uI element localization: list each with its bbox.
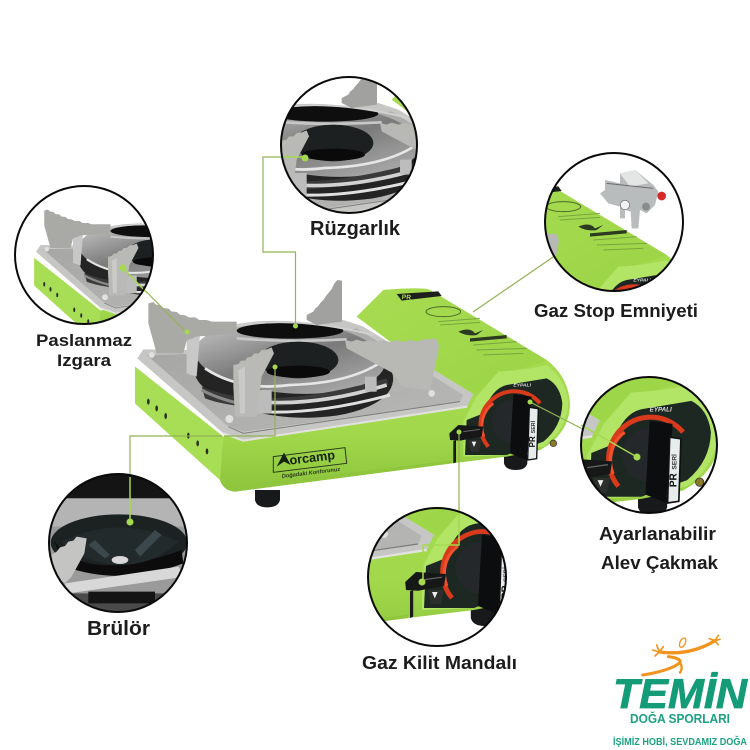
- label: Brülör: Brülör: [87, 618, 150, 640]
- control panel with dial: SERİ: [530, 420, 537, 433]
- leader lines and dots on the stove: [123, 157, 637, 582]
- brand logo: Temin Doğa Sporları: [613, 635, 749, 748]
- gas lock latch: [449, 425, 483, 441]
- steel tray: [137, 320, 473, 441]
- control panel with dial: EYPALI: [513, 383, 532, 389]
- orcamp brand logo: [273, 448, 347, 480]
- stove product photo: PR: [402, 294, 411, 302]
- logo subtitle: DOĞA SPORLARI: [630, 711, 730, 726]
- orcamp brand logo: orcamp: [289, 448, 336, 468]
- logo wordmark: TEMİN: [613, 670, 749, 717]
- stove product photo: [135, 280, 570, 507]
- stove feet: [255, 455, 527, 507]
- pan support grates: [148, 280, 439, 423]
- label: Gaz Kilit Mandalı: Gaz Kilit Mandalı: [362, 653, 517, 673]
- control panel with dial: [465, 378, 562, 460]
- callout circle: Gaz Stop Emniyeti: [544, 152, 684, 292]
- callout circle: Brülör: [45, 470, 195, 613]
- callout circle: Gaz Kilit Mandalı: [367, 507, 507, 647]
- icon: gas valve: [600, 170, 666, 228]
- callout circle: Ayarlanabilir Alev Çakmak: [580, 376, 718, 514]
- label: Ayarlanabilir Alev Çakmak: Ayarlanabilir: [599, 524, 716, 544]
- label: Paslanmaz Izgara: Paslanmaz: [36, 331, 132, 350]
- label: Ayarlanabilir Alev Çakmak: [599, 524, 719, 573]
- label: Ayarlanabilir Alev Çakmak: Alev Çakmak: [601, 553, 719, 573]
- orcamp brand logo: Doğadaki Konforunuz: [282, 467, 341, 480]
- stove body: [135, 288, 570, 492]
- burner rings: [187, 315, 396, 424]
- side vent holes: [147, 399, 208, 454]
- icon: orange running figure: [643, 635, 720, 675]
- callout circle: Paslanmaz Izgara: [14, 185, 154, 325]
- label: Paslanmaz Izgara: Izgara: [57, 351, 112, 370]
- label: Paslanmaz Izgara: [36, 331, 132, 370]
- control panel with dial: PR: [528, 436, 537, 447]
- callout circle: Rüzgarlık: [280, 76, 418, 214]
- label: Gaz Stop Emniyeti: Gaz Stop Emniyeti: [534, 301, 698, 321]
- label: Rüzgarlık: Rüzgarlık: [310, 218, 401, 240]
